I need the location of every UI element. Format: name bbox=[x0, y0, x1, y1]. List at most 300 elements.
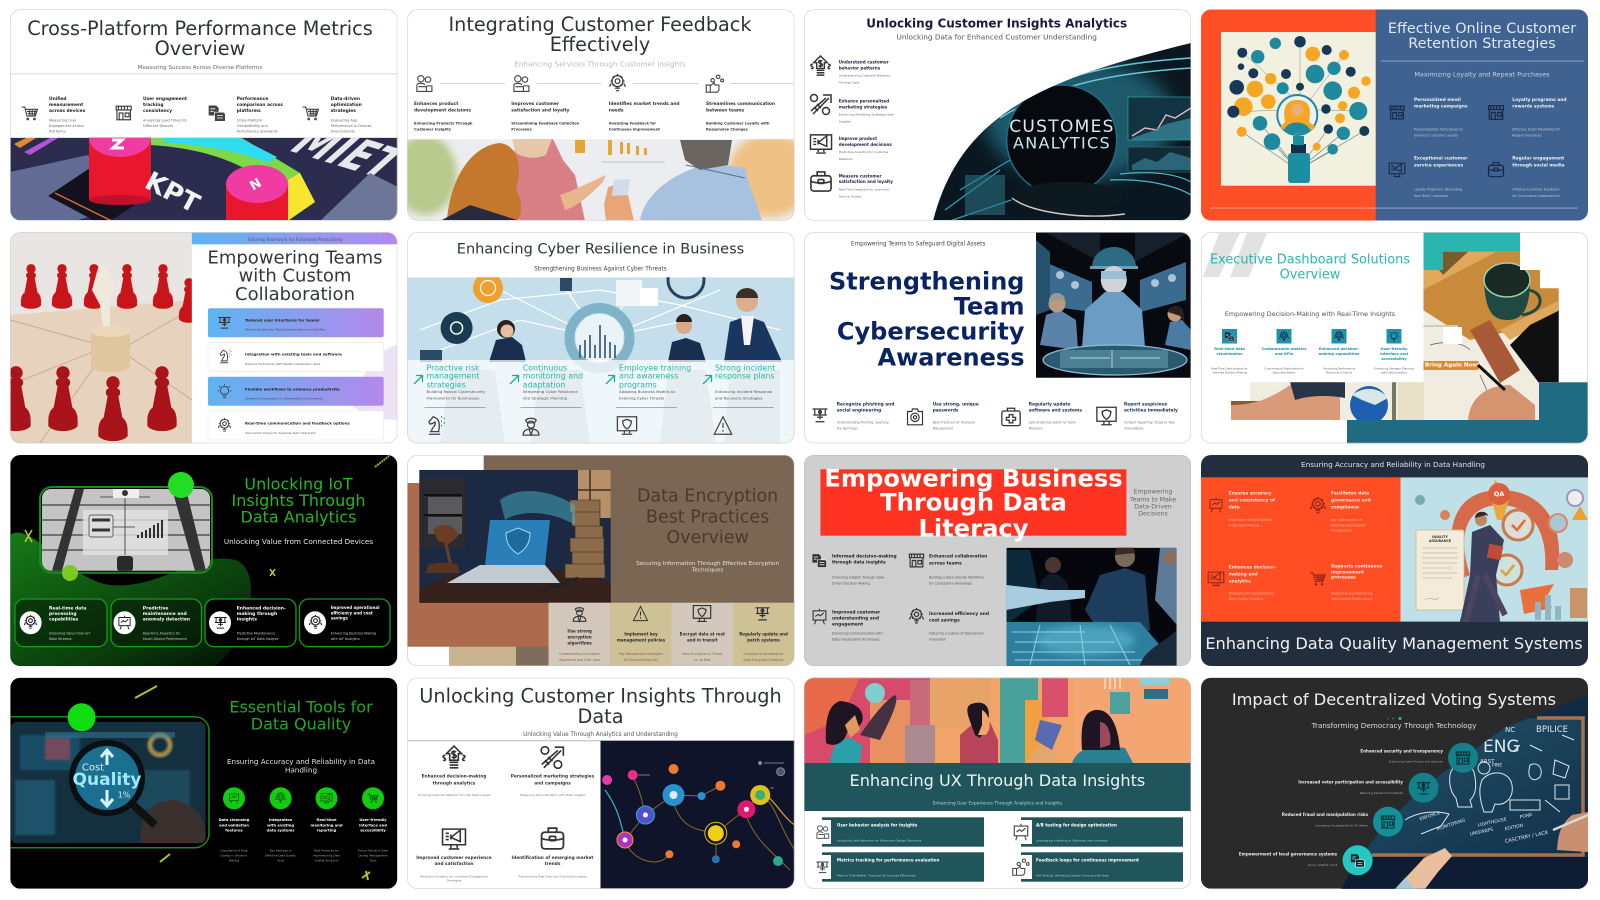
item: fraud risks bbox=[1282, 807, 1403, 837]
item: user engagement bbox=[116, 96, 188, 128]
card: Empowering Business Through Data Literacy bbox=[804, 455, 1191, 666]
item text: for Competitive Advantage bbox=[929, 581, 972, 585]
item text: Enhanced decision- bbox=[237, 605, 286, 611]
item text: Key Management Strategies bbox=[619, 652, 663, 656]
item text: visualization bbox=[1216, 352, 1243, 356]
item text: Performance in Diverse bbox=[331, 124, 372, 128]
card: Strengthening Team Cybersecurity Awareness bbox=[804, 232, 1191, 443]
item text: Enhanced decision- bbox=[1319, 347, 1360, 351]
item: enhances product development bbox=[414, 76, 473, 132]
item text: Quality in Decision- bbox=[220, 854, 248, 858]
item text: Increasing Accessibility for All Voters bbox=[1315, 824, 1368, 828]
item text: Implement key bbox=[624, 631, 658, 636]
item text: Responsive Changes bbox=[706, 128, 748, 132]
item text: Integration bbox=[269, 818, 293, 822]
icon: monitor megaphone bbox=[810, 135, 832, 153]
item text: across teams bbox=[929, 560, 962, 566]
item text: Strategies bbox=[447, 878, 462, 882]
item text: Metrics at a Glance bbox=[1326, 371, 1352, 375]
image: chalkboard with voting doodles: EDITION bbox=[1504, 823, 1524, 832]
subtitle: Transforming Democracy Through Technology bbox=[1311, 721, 1477, 730]
pager dots bbox=[1387, 717, 1402, 720]
item text: Use strong bbox=[567, 628, 592, 633]
image: magnifier over quality dashboard bbox=[5, 703, 209, 848]
item text: Service Quality bbox=[839, 194, 862, 198]
item text: Empowerment of local governance systems bbox=[1239, 851, 1338, 856]
item text: Improved operational bbox=[331, 604, 380, 610]
title banner bbox=[820, 464, 1126, 542]
image: network of glowing data nodes bbox=[600, 741, 795, 889]
decorative squiggles bbox=[135, 686, 370, 880]
title: Impact of Decentralized Voting Systems bbox=[1232, 690, 1556, 709]
image: customer analytics sphere bbox=[925, 40, 1195, 225]
card: Data Encryption Best Practices Overview bbox=[407, 455, 794, 667]
item text: and Recovery Strategies bbox=[715, 395, 763, 400]
item text: anomaly detection bbox=[143, 616, 190, 622]
item text: Improving Customer Retention Through Data Analysis bbox=[418, 793, 491, 797]
title: Essential Tools for bbox=[229, 697, 373, 716]
item text: Flexible workflows to enhance productivity bbox=[245, 386, 340, 391]
item text: Personalized marketing strategies bbox=[511, 773, 595, 779]
item text: Importance of Data Quality bbox=[1229, 518, 1272, 522]
item text: Immediately bbox=[1124, 426, 1144, 430]
item text: Data Encryption in Transit bbox=[682, 652, 723, 656]
title: Integrating Customer Feedback bbox=[449, 12, 752, 36]
subtitle: Maximizing Loyalty and Repeat Purchases bbox=[1414, 71, 1550, 79]
item text: Compliance Standards for bbox=[743, 652, 784, 656]
title: Unlocking Customer Insights Through bbox=[419, 684, 782, 707]
card: Impact of Decentralized Voting Systems bbox=[1201, 678, 1590, 890]
item: encryption algorithms bbox=[548, 603, 611, 666]
icon: board bbox=[1010, 820, 1032, 844]
item text: Measuring and Monitoring bbox=[1331, 591, 1373, 595]
item: personalized email bbox=[1390, 96, 1468, 137]
icon: briefcase bbox=[811, 172, 831, 191]
arrow bbox=[510, 376, 518, 384]
icon: dollar house bbox=[811, 56, 830, 75]
icon: board bbox=[1208, 572, 1224, 586]
item text: Regular engagement bbox=[1512, 155, 1564, 161]
item: personalized marketing bbox=[511, 747, 595, 797]
item text: Engagement Across bbox=[49, 124, 84, 128]
item text: Analyzing Feedback for bbox=[609, 122, 656, 126]
item text: Data-driven bbox=[331, 96, 360, 102]
item text: Integration with existing tools and software bbox=[245, 351, 342, 356]
image: red pawns and white figure on pedestal bbox=[1, 232, 199, 444]
item: improved customer experience bbox=[416, 829, 492, 882]
item text: Use strong, unique bbox=[933, 401, 979, 407]
title: Best Practices bbox=[646, 507, 769, 527]
subtitle: Unlocking Value from Connected Devices bbox=[224, 537, 373, 546]
title: Data Quality bbox=[251, 714, 351, 733]
title: Overview bbox=[1280, 267, 1340, 282]
image: magnifier over quality dashboard: Quality bbox=[73, 770, 141, 790]
item text: Tailored Solutions for Team Communication and Workflow bbox=[244, 328, 326, 332]
item: voter participation bbox=[1298, 773, 1438, 803]
item text: Predictive bbox=[143, 605, 168, 611]
item text: making and bbox=[1229, 571, 1258, 577]
item: A/B testing bbox=[1010, 817, 1183, 847]
item text: Smart Device Performance bbox=[143, 637, 187, 641]
item text: data bbox=[1229, 504, 1240, 510]
item text: service experiences bbox=[1414, 162, 1464, 168]
item text: lscnrt, pubfrta, fnxrt bbox=[1308, 863, 1338, 867]
title: Cross-Platform Performance Metrics bbox=[27, 16, 373, 40]
item text: activities immediately bbox=[1124, 407, 1178, 413]
image: KPI dashboard dial bbox=[10, 138, 398, 220]
item text: Compatibility and bbox=[237, 124, 268, 128]
image: customer analytics sphere: CUSTOMES bbox=[1009, 117, 1115, 137]
image: chalkboard with voting doodles: MONITORING bbox=[1436, 817, 1467, 832]
icon: camera bbox=[908, 409, 922, 425]
title: Team bbox=[954, 293, 1024, 321]
image: KPI dashboard dial: KPT bbox=[140, 166, 204, 220]
item text: measurement bbox=[49, 102, 83, 108]
image: team around glowing data table bbox=[1006, 544, 1177, 666]
item text: Evaluating App bbox=[331, 119, 358, 123]
item text: reporting bbox=[317, 829, 337, 833]
item text: Identification of emerging market bbox=[512, 854, 593, 860]
item text: passwords bbox=[933, 407, 959, 413]
subtitle: Teams to Make bbox=[1129, 496, 1176, 503]
item text: Building Customer Loyalty with bbox=[706, 122, 770, 126]
item text: Regularly update and bbox=[739, 631, 788, 636]
item text: Customizable Dashboards for bbox=[1264, 367, 1305, 371]
item: enhanced collaboration bbox=[909, 553, 987, 585]
item text: and in transit bbox=[687, 637, 718, 642]
item text: monitoring and bbox=[311, 823, 343, 827]
item: security and transparency bbox=[1360, 743, 1478, 773]
item text: Your Best Customers bbox=[1414, 194, 1448, 198]
item text: Making bbox=[229, 859, 239, 863]
item text: User-Centric Design for Seamless Team Interaction bbox=[245, 431, 316, 435]
item text: through analytics bbox=[433, 780, 476, 786]
item text: Visualizing Performance bbox=[1323, 367, 1355, 371]
image: chalkboard with voting doodles: PINE bbox=[1492, 762, 1502, 768]
icon: tower bbox=[218, 318, 231, 328]
item text: needs bbox=[609, 107, 624, 113]
item text: Tools bbox=[369, 859, 377, 863]
item text: savings bbox=[331, 615, 348, 620]
image: customer network illustration bbox=[1221, 32, 1376, 186]
item: informed decision-making bbox=[812, 553, 897, 585]
icon: people bbox=[813, 820, 831, 844]
subtitle: Unlocking Value Through Analytics and Understanding bbox=[523, 732, 678, 738]
item: accuracy and consistency bbox=[1210, 490, 1275, 527]
item text: for Continuous Improvement bbox=[1512, 194, 1560, 198]
title: Overview bbox=[155, 36, 245, 60]
item: encrypt data bbox=[672, 603, 733, 666]
item: feedback loops bbox=[1010, 852, 1183, 882]
item text: Strong incident bbox=[715, 363, 775, 372]
title: Overview bbox=[666, 528, 749, 548]
item text: Real-time Analytics for bbox=[143, 631, 181, 635]
item text: Best Practices for Password bbox=[933, 420, 975, 424]
title: Unlocking Customer Insights Analytics bbox=[866, 16, 1127, 30]
title band: Enhancing User Experience Through Analytics and Insights bbox=[933, 800, 1063, 806]
item text: Data Quality Performance bbox=[1331, 597, 1372, 601]
image: chalkboard with voting doodles: ENG bbox=[1483, 737, 1520, 757]
icon disc bbox=[209, 611, 231, 634]
item text: Enhances decision- bbox=[1229, 564, 1276, 570]
item: predictive maintenance bbox=[111, 599, 202, 647]
item: real-time processing bbox=[15, 599, 107, 647]
item text: Enhanced collaboration bbox=[929, 553, 987, 559]
item text: Future Trends in Data bbox=[358, 849, 388, 853]
item: performance comparison bbox=[209, 96, 283, 133]
item text: management policies bbox=[617, 637, 666, 642]
item text: Platforms bbox=[49, 129, 66, 133]
item text: trends bbox=[545, 860, 561, 866]
item text: with IoT Analytics bbox=[331, 637, 360, 641]
item text: making capabilities bbox=[1319, 352, 1360, 356]
item text: Real-time data bbox=[1214, 347, 1245, 351]
icon: monitor bbox=[1389, 163, 1405, 177]
item: tailored user interfaces bbox=[208, 308, 384, 337]
item text: accessibility bbox=[360, 829, 386, 833]
item text: Analyzing User Behavior for Enhanced Design Decisions bbox=[837, 839, 922, 843]
image: chalkboard with voting doodles: CASCTRRY / LACK bbox=[1504, 830, 1550, 845]
item: product development bbox=[810, 135, 892, 161]
item text: Customizable metrics bbox=[1262, 347, 1307, 351]
item text: Identifies market trends and bbox=[609, 100, 680, 106]
subtitle: Handling bbox=[285, 765, 317, 774]
item text: Performance bbox=[237, 96, 268, 102]
item text: governance and bbox=[1331, 497, 1371, 503]
item text: Loyalty Programs: Rewarding bbox=[1414, 188, 1462, 192]
title: Data Analytics bbox=[241, 507, 356, 526]
item text: Real-time communication and feedback options bbox=[245, 420, 350, 425]
icon: tower bbox=[812, 409, 828, 422]
icon disc bbox=[223, 787, 245, 809]
icon tile bbox=[1222, 329, 1237, 344]
item text: Understanding Phishing: Spotting bbox=[837, 420, 889, 424]
title band: Enhancing UX Through Data Insights bbox=[850, 771, 1145, 790]
item: recognize phishing bbox=[812, 401, 894, 430]
card: Empowering Teams with Custom Collaboration bbox=[1, 232, 398, 444]
item text: Streamlining Feedback Collection bbox=[511, 122, 580, 126]
item text: Key Features of bbox=[270, 849, 292, 853]
item text: Enhances product bbox=[414, 100, 458, 106]
item text: Exceptional customer bbox=[1414, 155, 1468, 161]
item: metrics tracking bbox=[813, 852, 984, 882]
item text: Enhancing Strategic Planning bbox=[1374, 367, 1414, 371]
icon: documents bbox=[209, 106, 225, 121]
title: Empowering Teams bbox=[207, 247, 383, 268]
item text: strategies bbox=[331, 108, 356, 114]
icon tile bbox=[1386, 329, 1402, 344]
title: Awareness bbox=[878, 343, 1024, 371]
image: chalkboard with voting doodles: UNISWAPS bbox=[1469, 827, 1494, 837]
decorative quote mark bbox=[1203, 233, 1267, 277]
item text: Management bbox=[1331, 529, 1353, 533]
item text: Predictive Analytics for Customer bbox=[839, 150, 889, 154]
icon disc bbox=[1448, 743, 1478, 773]
item text: Personalization Techniques to bbox=[1414, 127, 1463, 131]
item: data-driven optimization bbox=[303, 96, 372, 133]
item text: strategies bbox=[426, 380, 466, 389]
item text: Predictive Analytics for Customer Engagement bbox=[420, 874, 489, 878]
item text: through IoT Data Insights bbox=[237, 637, 279, 641]
item text: Effective Data Quality bbox=[1331, 523, 1366, 527]
item: proactive risk bbox=[414, 363, 486, 434]
image: colourful people with data charts bbox=[804, 677, 1192, 763]
title banner: Literacy bbox=[918, 514, 1029, 542]
icon: growth arrow bbox=[810, 94, 831, 114]
item: unified measurement bbox=[22, 96, 86, 133]
item: real-time visualization bbox=[1211, 329, 1249, 375]
item text: compliance bbox=[1331, 504, 1359, 510]
item text: processing bbox=[49, 610, 77, 616]
item text: Frameworks for Businesses bbox=[426, 395, 479, 400]
item: loyalty programs bbox=[1488, 96, 1566, 137]
icon: dollar house bbox=[443, 746, 465, 768]
item: continuous improvement bbox=[1310, 563, 1383, 601]
top strip: Tailoring Teamwork for Enhanced Productivity bbox=[246, 237, 343, 242]
icon: gear bbox=[1310, 497, 1326, 513]
icon: monitor shield bbox=[617, 417, 637, 434]
item text: comparison across bbox=[237, 102, 283, 108]
subtitle: Data-Driven bbox=[1134, 503, 1172, 510]
title: Executive Dashboard Solutions bbox=[1210, 252, 1410, 267]
subtitle: Decisions bbox=[1138, 510, 1168, 517]
icon: growth arrow bbox=[541, 747, 563, 768]
item text: Enhancing Marketing Strategies with bbox=[839, 112, 894, 116]
item text: analytics bbox=[1229, 578, 1251, 584]
image: chalkboard with voting doodles: ENFORCE bbox=[1419, 810, 1441, 822]
item text: marketing campaigns bbox=[1414, 103, 1468, 109]
item text: Strategies for Implementing bbox=[1229, 591, 1273, 595]
item text: Enhance personalized bbox=[839, 98, 889, 103]
item text: with Data Analytics bbox=[1381, 371, 1408, 375]
item: improves satisfaction bbox=[511, 76, 580, 132]
item text: improvement bbox=[1331, 569, 1364, 575]
image: chalkboard with voting doodles bbox=[1340, 694, 1590, 890]
icon: monitor shield bbox=[1097, 407, 1116, 425]
item text: between teams bbox=[706, 107, 745, 113]
item text: monitoring and bbox=[523, 371, 583, 380]
item text: Facilitates data bbox=[1331, 490, 1369, 496]
item text: Metrics tracking for performance evaluation bbox=[837, 857, 939, 862]
item text: Safe Browsing Habits for Team bbox=[1029, 420, 1076, 424]
icon: store bbox=[1488, 106, 1504, 119]
item text: Enhancing Products Through bbox=[414, 122, 473, 126]
item text: Innovation bbox=[929, 637, 946, 641]
item text: satisfaction and loyalty bbox=[839, 178, 893, 184]
item text: interface and bbox=[1380, 352, 1408, 356]
item text: User behavior analysis for insights bbox=[837, 822, 918, 827]
item text: optimization bbox=[331, 102, 362, 108]
item text: Measuring User bbox=[49, 119, 77, 123]
item text: Enhancing Incident Response bbox=[715, 388, 773, 394]
eyebrow: Ensuring Accuracy and Reliability in Data Handling bbox=[1301, 460, 1485, 469]
item text: Integrating Cyber Resilience bbox=[523, 388, 578, 394]
icon: gear bbox=[218, 418, 231, 431]
item text: making through bbox=[237, 610, 277, 616]
icon: gear bbox=[909, 608, 924, 623]
item text: Employee training bbox=[619, 363, 691, 372]
arrow bbox=[606, 376, 614, 384]
item text: understanding and bbox=[832, 615, 879, 621]
image: desk with coffee mug, notebook and hands: Bring Again Noest bbox=[1425, 362, 1482, 368]
item text: engagement bbox=[832, 621, 863, 627]
icon: cart bbox=[22, 107, 38, 120]
image: quality assurance illustration bbox=[1400, 477, 1588, 622]
image: magnifier over quality dashboard: Cost bbox=[82, 762, 104, 774]
arrow bbox=[414, 376, 422, 384]
item text: Processes bbox=[511, 128, 532, 132]
item text: for Enhanced Security bbox=[624, 658, 658, 662]
title: Retention Strategies bbox=[1408, 36, 1556, 52]
item text: Utilizing Customer Feedback bbox=[1512, 188, 1559, 192]
image: quality assurance illustration: QUALITY bbox=[1432, 535, 1449, 539]
subtitle: Strengthening Business Against Cyber Threats bbox=[534, 266, 667, 272]
item text: Data Encryption Practices bbox=[744, 658, 784, 662]
item text: Improves customer bbox=[511, 100, 560, 106]
title: Effectively bbox=[550, 32, 650, 56]
title: Data bbox=[577, 704, 624, 728]
item text: efficiency and cost bbox=[331, 610, 373, 615]
item text: Reducing Election Fraud Risks bbox=[1360, 791, 1403, 795]
icon: officer bbox=[523, 418, 539, 435]
item: identifies market trends bbox=[609, 74, 680, 132]
item text: Management bbox=[933, 426, 954, 430]
item: continuous monitoring bbox=[510, 363, 583, 435]
image: woman at holographic security table bbox=[1036, 232, 1191, 378]
item: governance and compliance bbox=[1310, 490, 1371, 533]
decorative sparks bbox=[25, 530, 275, 576]
item text: Tailored user interfaces for teams bbox=[245, 317, 320, 322]
item: streamlines communication bbox=[706, 75, 775, 132]
item: realtime communication bbox=[208, 411, 384, 440]
item text: Repeat Purchases bbox=[1512, 133, 1542, 137]
icon: monitor megaphone bbox=[443, 829, 465, 849]
item text: Quality Management bbox=[358, 854, 389, 858]
item text: development decisions bbox=[414, 107, 471, 113]
icon: bulb bbox=[218, 384, 231, 398]
item text: Improved customer experience bbox=[416, 854, 492, 860]
item text: Tools bbox=[276, 859, 285, 863]
item text: and awareness bbox=[619, 371, 678, 380]
card: Enhancing Cyber Resilience in Business bbox=[407, 232, 795, 445]
item text: platforms bbox=[237, 108, 261, 114]
item text: insights bbox=[237, 616, 257, 622]
item text: Best Practices for bbox=[314, 849, 340, 853]
icon: store bbox=[909, 554, 924, 567]
image: chalkboard with voting doodles: PONK bbox=[1519, 812, 1534, 820]
item text: Transforming Raw Data into Actionable Insights bbox=[517, 874, 587, 878]
item text: Environments bbox=[331, 129, 355, 133]
item text: Building Robust Cybersecurity bbox=[426, 388, 486, 394]
item: improved operational efficiency bbox=[300, 599, 390, 647]
item: enhanced decision making bbox=[1319, 329, 1360, 375]
item: real-time monitoring bbox=[311, 787, 343, 863]
icon disc bbox=[1373, 807, 1403, 837]
item text: Through Data bbox=[838, 81, 859, 85]
icon disc bbox=[270, 787, 292, 809]
item text: Building a Data-Literate Workforce bbox=[929, 576, 984, 580]
item text: Fostering a Culture of Data-Driven bbox=[929, 632, 984, 636]
item text: behavior patterns bbox=[839, 65, 881, 70]
item text: A/B Testing: Validating Design Choices with Data bbox=[1036, 874, 1109, 878]
item text: development decisions bbox=[839, 142, 892, 146]
icon: officer bbox=[573, 608, 586, 621]
item text: Algorithms and Their Uses bbox=[559, 658, 600, 662]
item text: processes bbox=[1331, 574, 1356, 580]
title: Strengthening bbox=[829, 268, 1024, 296]
title: Data Encryption bbox=[637, 487, 778, 507]
item text: Real-Time Feedback for Improved bbox=[839, 187, 889, 191]
